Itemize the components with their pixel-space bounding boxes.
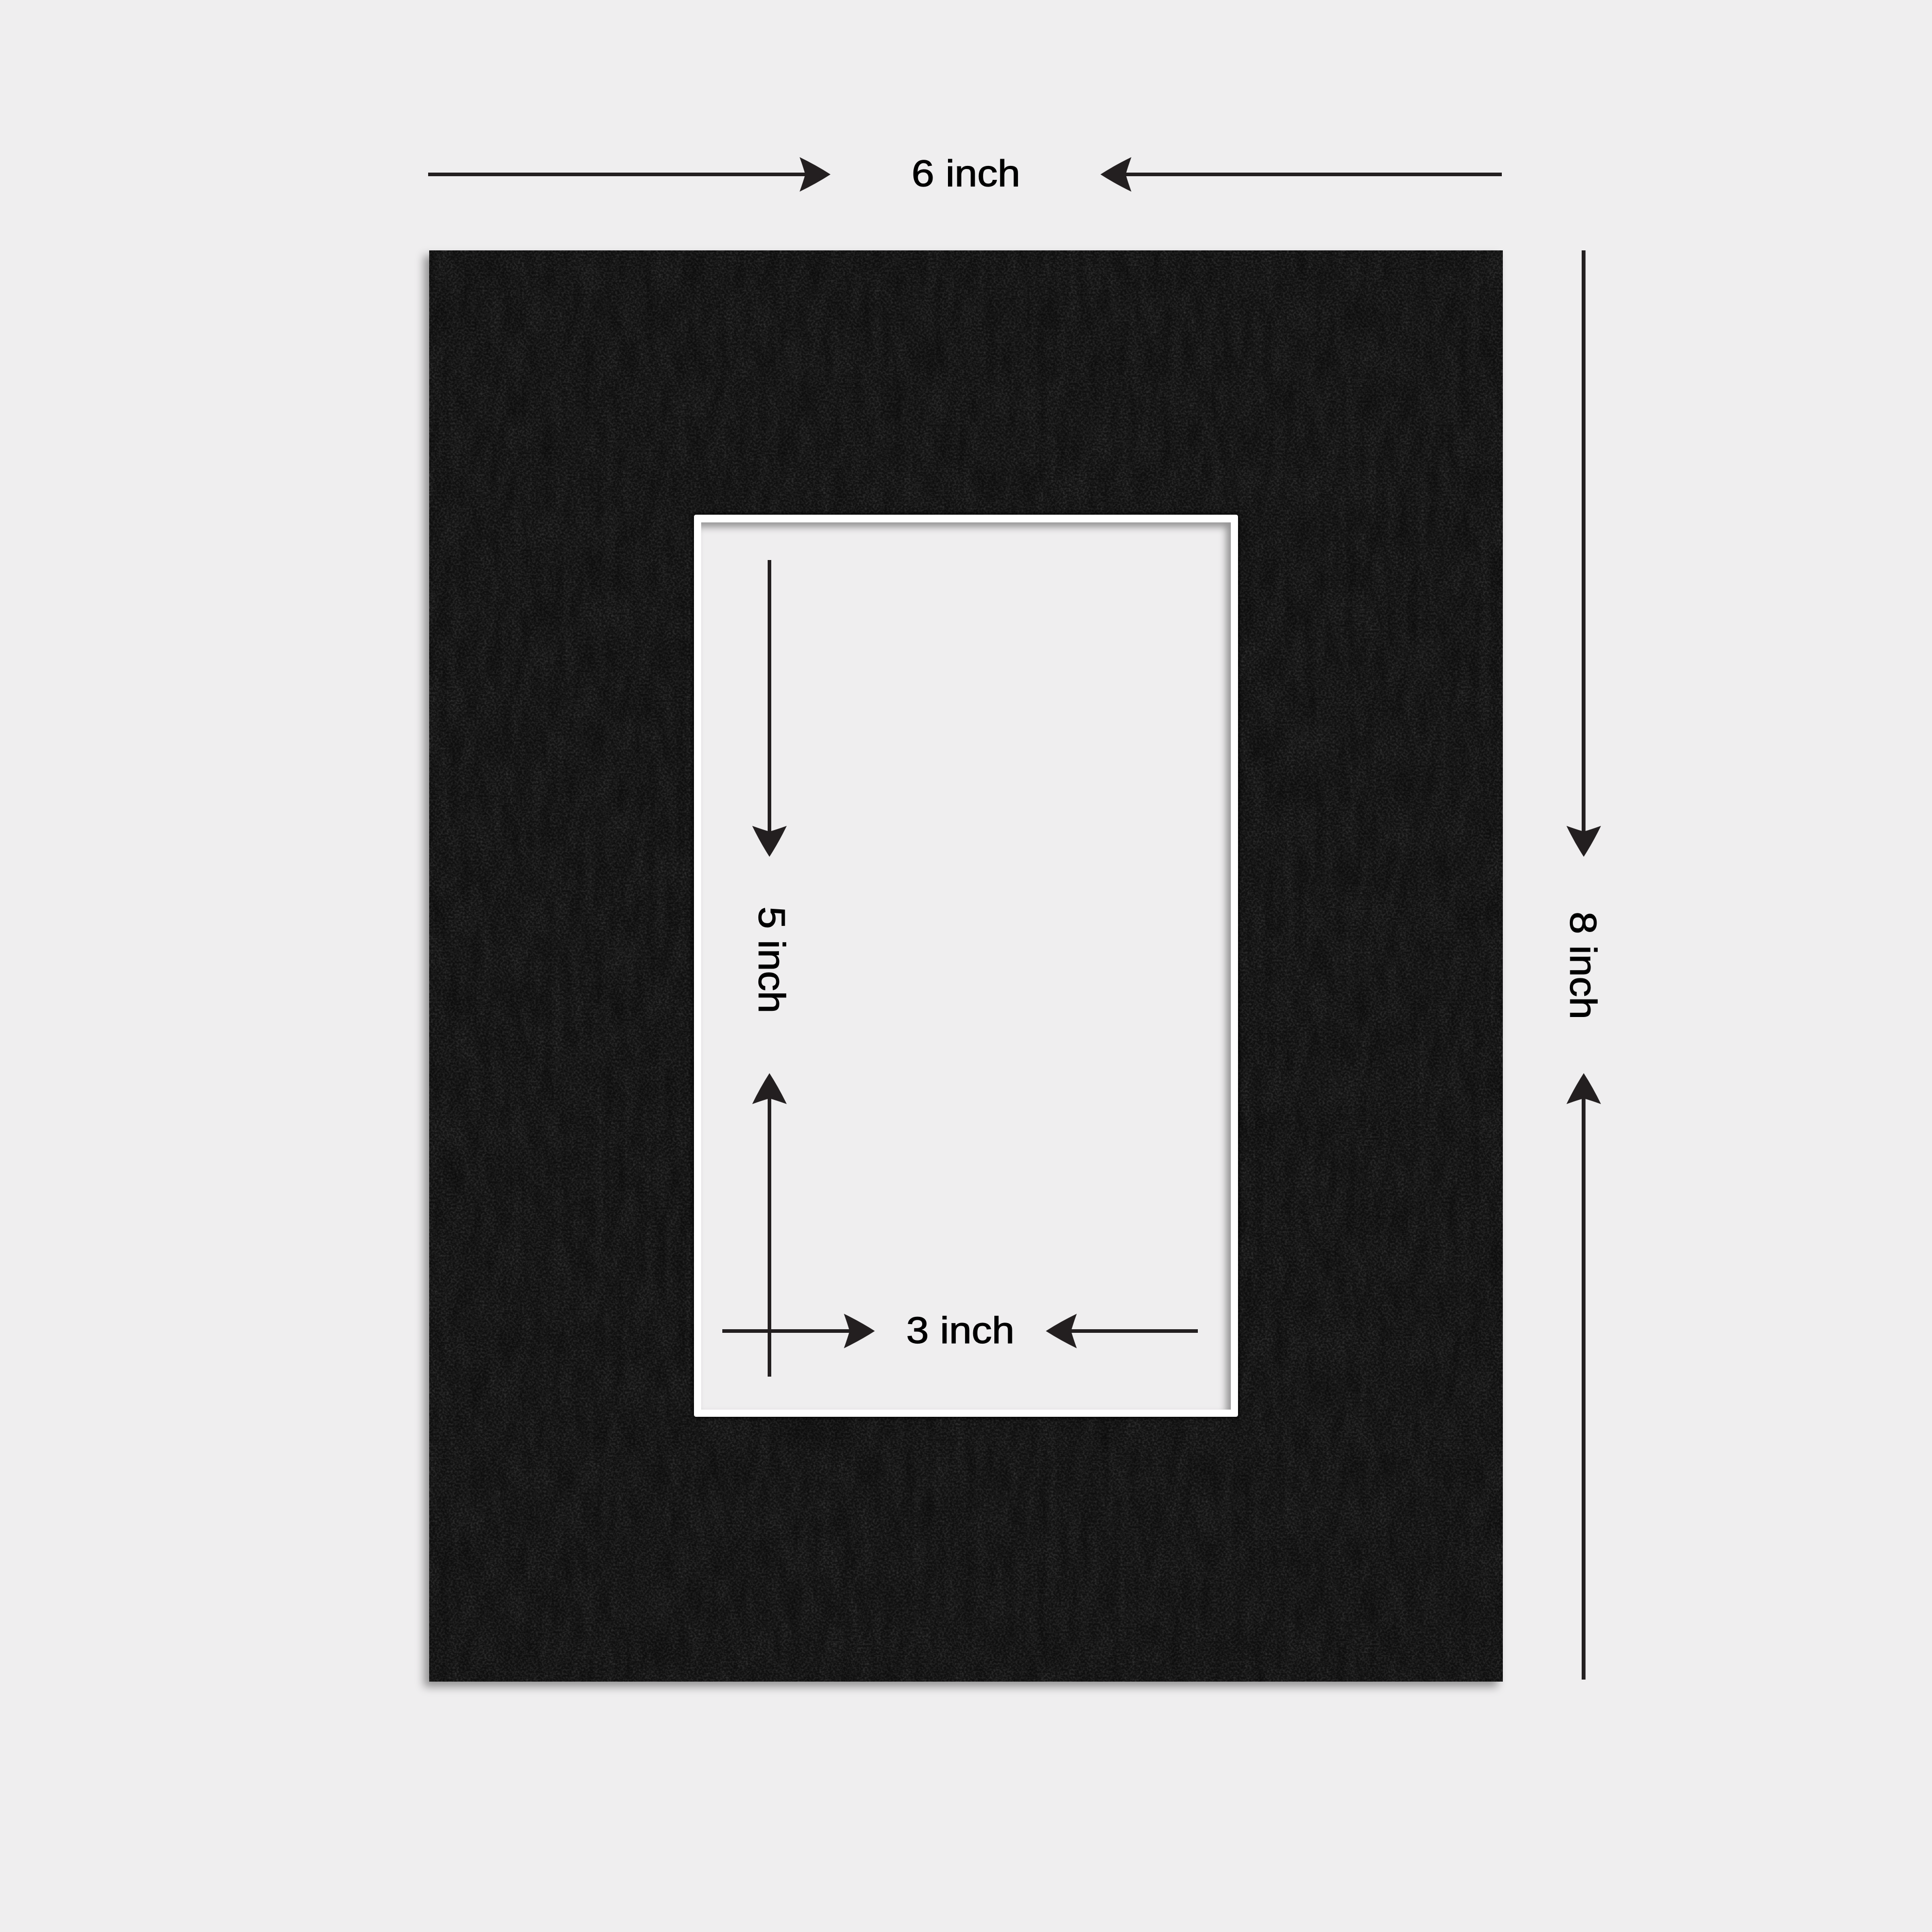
arrow: outer height, pointing down	[1566, 250, 1601, 857]
panel: white bevelled mat opening	[694, 515, 1238, 1417]
panel: black mat board	[429, 250, 1503, 1682]
arrow: top width, pointing left	[1100, 157, 1502, 192]
arrow: opening height, pointing down	[752, 560, 787, 857]
panel: inner window with inset shadow	[701, 522, 1231, 1410]
label: outer width: 6 inch	[911, 152, 1020, 195]
arrow: opening width, pointing left	[1046, 1314, 1198, 1348]
arrow: top width, pointing right	[428, 157, 831, 192]
label: opening width: 3 inch	[906, 1310, 1014, 1351]
label: outer height: 8 inch	[1562, 912, 1604, 1019]
arrow: outer height, pointing up	[1566, 1073, 1601, 1680]
arrow: opening width, pointing right	[722, 1314, 875, 1348]
arrow: opening height, pointing up	[752, 1073, 787, 1377]
label: opening height: 5 inch	[751, 907, 792, 1013]
